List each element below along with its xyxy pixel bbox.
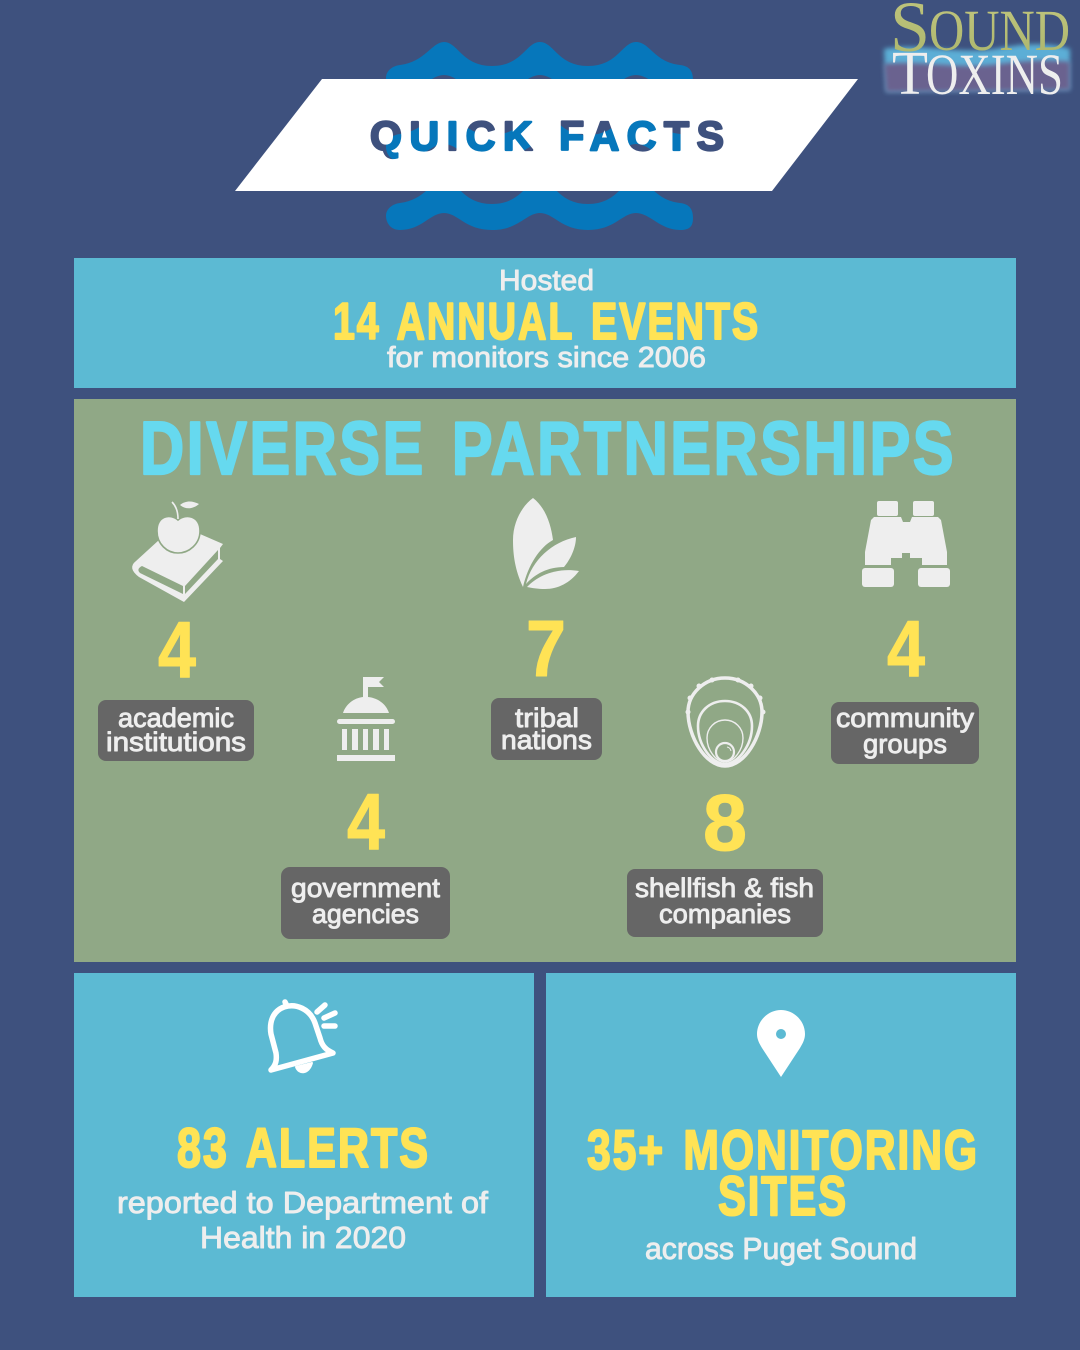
label: shellfish and fish companies xyxy=(627,869,823,937)
text: reported to Department of Health: Health in 2020 xyxy=(200,1220,406,1255)
panel: alerts xyxy=(74,973,534,1297)
number: government: 4 xyxy=(347,777,385,866)
text: since 2006: for monitors since 2006 xyxy=(387,342,706,374)
label: community groups xyxy=(831,702,979,764)
icon: location pin xyxy=(757,1010,805,1077)
heading: monitoring sites xyxy=(587,1118,979,1227)
label: government agencies: agencies xyxy=(312,899,419,929)
heading: monitoring sites: SITES xyxy=(718,1164,848,1227)
icon: leaves xyxy=(513,498,579,589)
label: government agencies: government xyxy=(291,873,441,903)
label: government agencies xyxy=(281,867,450,939)
text: across Puget Sound: across Puget Sound xyxy=(645,1231,917,1266)
label: academic institutions: academic xyxy=(118,703,234,733)
label: community groups: community xyxy=(836,703,975,733)
icon: binoculars xyxy=(862,501,950,587)
heading: annual events: 14 ANNUAL EVENTS xyxy=(333,293,760,351)
label: tribal nations: tribal xyxy=(515,703,579,733)
label: community groups: groups xyxy=(863,729,947,759)
logo: Sound Toxins xyxy=(884,0,1070,108)
label: tribal nations: nations xyxy=(501,725,592,755)
panel: diverse partnerships xyxy=(74,399,1016,962)
text: reported to Department of Health: reported to Department of xyxy=(117,1185,488,1220)
label: tribal nations xyxy=(491,698,602,760)
text: hosted: Hosted xyxy=(499,265,594,297)
icon: upper wave xyxy=(386,42,693,92)
label: academic institutions: institutions xyxy=(106,727,246,757)
logo: Sound Toxins: T xyxy=(892,40,928,108)
number: academic: 4 xyxy=(158,605,196,694)
heading: 83 alerts: 83 ALERTS xyxy=(177,1116,430,1179)
banner shape xyxy=(235,79,858,191)
icon: apple on book xyxy=(132,502,223,602)
icon: oyster shell xyxy=(686,678,766,766)
icon: capitol building xyxy=(337,677,395,761)
label: shellfish and fish companies: shellfish & fish xyxy=(635,873,814,903)
number: shellfish: 8 xyxy=(703,778,747,867)
title: QUICK FACTS xyxy=(370,113,724,159)
text: reported to Department of Health xyxy=(117,1185,488,1255)
panel: annual events xyxy=(74,258,1016,388)
panel: monitoring sites xyxy=(546,973,1016,1297)
number: tribal: 7 xyxy=(526,604,566,693)
icon: bell xyxy=(271,1002,335,1072)
title banner with waves xyxy=(235,42,858,230)
label: shellfish and fish companies: companies xyxy=(659,899,791,929)
label: academic institutions xyxy=(98,700,254,761)
icon: lower wave xyxy=(386,180,693,230)
number: community: 4 xyxy=(887,604,925,693)
